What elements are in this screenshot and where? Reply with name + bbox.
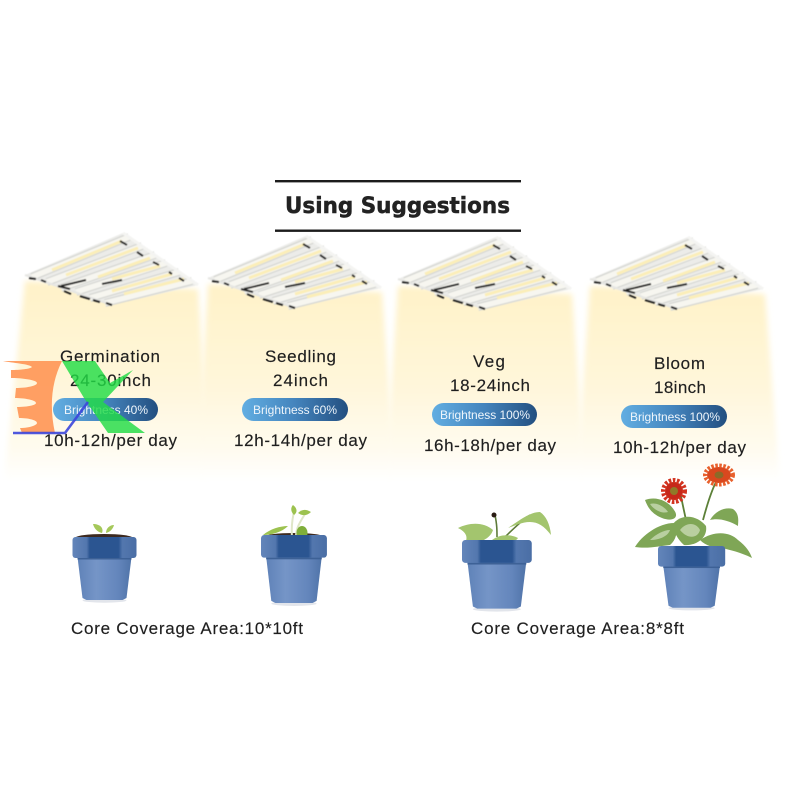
plant pot: seedling xyxy=(261,505,327,606)
grow light: seedling xyxy=(208,236,381,308)
light beam: veg xyxy=(385,286,586,482)
stage text: seedling: Seedling xyxy=(265,347,336,366)
stage text: germination: 24-30inch xyxy=(70,371,151,390)
plant pot: bloom xyxy=(635,466,752,610)
plant pot: germination xyxy=(72,524,136,603)
stage text: seedling: Brightness 60% xyxy=(253,403,337,417)
stage text: germination: Brightness 40% xyxy=(64,403,148,417)
stage text: germination: 10h-12h/per day xyxy=(44,431,178,450)
stage text: seedling: 24inch xyxy=(273,371,328,390)
stage text: seedling xyxy=(234,347,368,450)
stage text: veg: 18-24inch xyxy=(450,376,530,395)
grow light: germination xyxy=(25,233,198,305)
stage text: veg: Brightness 100% xyxy=(440,408,530,422)
stage text: bloom: Bloom xyxy=(654,354,705,373)
red flower xyxy=(664,480,684,502)
stage text: seedling: 12h-14h/per day xyxy=(234,431,368,450)
title: Using Suggestions xyxy=(285,193,510,219)
stage text: veg xyxy=(424,352,556,455)
light beam: seedling xyxy=(196,284,396,482)
stage text: veg: 16h-18h/per day xyxy=(424,436,556,455)
stage text: germination xyxy=(44,347,178,450)
stage text: veg: Veg xyxy=(473,352,505,371)
light beam: bloom xyxy=(576,286,780,482)
light beam: germination xyxy=(4,281,211,482)
stage text: bloom xyxy=(613,354,746,457)
stage text: bloom: 18inch xyxy=(654,378,706,397)
plant pot: veg xyxy=(458,512,551,612)
coverage label: 8*8ft: Core Coverage Area:8*8ft xyxy=(471,619,684,638)
stage text: bloom: Brightness 100% xyxy=(630,410,720,424)
coverage label: 10*10ft: Core Coverage Area:10*10ft xyxy=(71,619,303,638)
grow light: veg xyxy=(398,237,571,309)
grow light: bloom xyxy=(590,237,763,309)
watermark logo xyxy=(3,361,145,433)
stage text: germination: Germination xyxy=(60,347,160,366)
orange flower xyxy=(705,466,733,484)
stage text: bloom: 10h-12h/per day xyxy=(613,438,746,457)
